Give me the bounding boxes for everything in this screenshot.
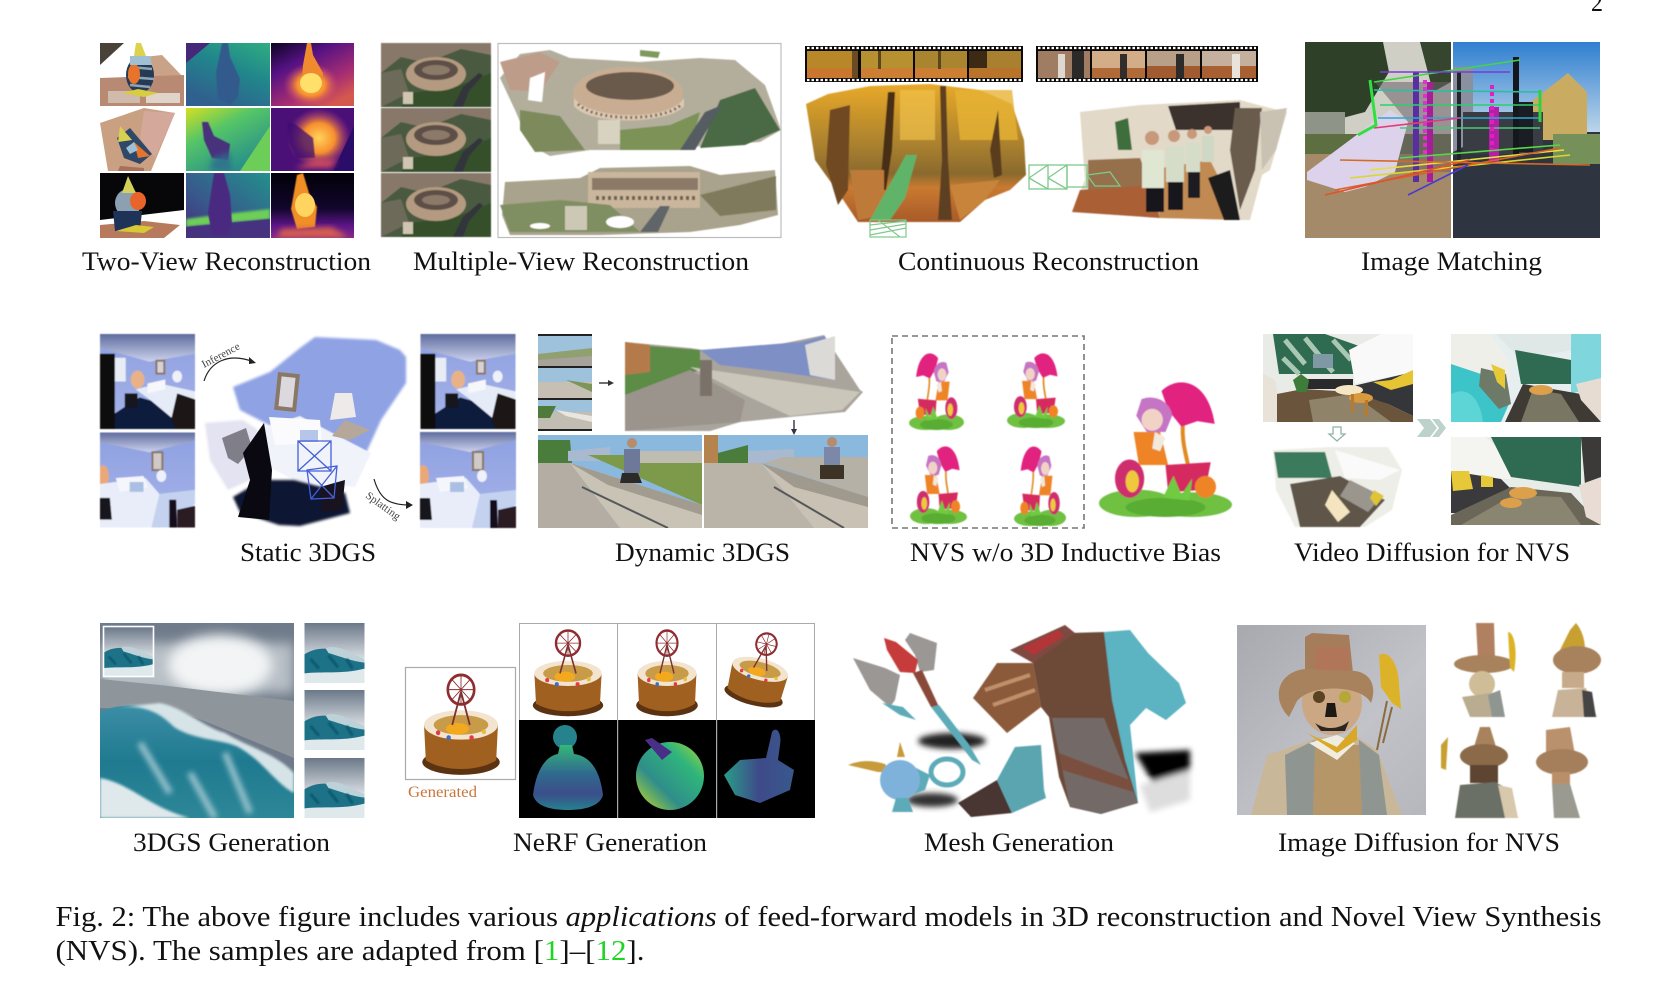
image: input room [1263,334,1413,422]
image: feature view 1 [271,43,354,106]
figure caption: (NVS). The samples are adapted from [ 1]–[12]. [56,935,645,967]
panel: 3DGS generation [100,623,364,857]
boot [958,745,1046,817]
panel: video diffusion for NVS [1263,334,1601,567]
image: colosseum frames [381,43,491,237]
image: wave views [304,623,364,818]
caption: Dynamic 3DGS [615,538,790,567]
arrow: splatting: Splatting [363,490,403,523]
toy views [909,353,1066,526]
camera path: forest [870,220,906,237]
image: input views [97,334,195,528]
rendered cake views [520,624,814,720]
image: parrot view 1 [100,43,184,106]
panel: dynamic 3DGS [538,334,868,567]
axe [853,633,981,765]
point cloud: forest [806,84,1026,222]
image: rendered views [417,334,516,528]
image: rendered views [538,435,702,528]
camera path: room [1029,165,1120,189]
image: feature view 2 [271,108,354,171]
panel: multiple-view reconstruction [381,43,781,276]
caption: Image Matching [1361,247,1542,276]
caption: Mesh Generation [924,828,1114,857]
image: large wave [100,623,294,818]
point cloud: top view [500,50,781,156]
image: scarecrow portrait [1237,625,1426,815]
image: depth view 1 [186,43,270,106]
armor [973,625,1186,814]
3D gaussian scene [205,337,406,526]
lamp [848,742,963,812]
label: generated: Generated [408,784,477,801]
caption: Multiple-View Reconstruction [413,247,749,276]
arrow: inference: Inference [200,341,242,371]
image: film frames [538,334,592,431]
panel: static 3DGS [97,334,516,567]
image: left playground [1305,42,1451,238]
panel: NVS without 3D inductive bias [892,336,1232,567]
depth cake views [519,720,815,818]
arrow: down outline [1329,427,1345,441]
arrow: inference [200,341,256,381]
panel: mesh generation [848,625,1190,857]
image: parrot view 3 [100,173,184,238]
generated cake frame [406,668,516,780]
image: right playground [1453,42,1600,238]
panel: image diffusion for NVS [1237,623,1601,857]
arrow: down [791,420,797,435]
caption: NVS w/o 3D Inductive Bias [910,538,1221,567]
box: colosseum point cloud [498,44,781,238]
caption: Two-View Reconstruction [82,247,371,276]
chevrons [1417,419,1446,437]
panel: continuous reconstruction [805,46,1287,276]
caption: Static 3DGS [240,538,376,567]
image: output top [1451,334,1601,422]
image: output bottom [1451,437,1601,525]
point cloud: road scene [625,335,863,431]
film strip: room [1036,46,1258,82]
scarecrow views [1441,623,1601,818]
panel: two-view reconstruction [82,43,371,276]
caption: Image Diffusion for NVS [1278,828,1560,857]
arrow: splatting [363,479,413,523]
caption: Continuous Reconstruction [898,247,1199,276]
large toy [1099,382,1232,517]
point cloud: room [1072,100,1287,220]
caption: NeRF Generation [513,828,707,857]
caption: 3DGS Generation [133,828,330,857]
figure caption [56,901,1602,967]
image: depth view 3 [186,173,270,238]
image: feature view 3 [271,173,354,238]
caption: Video Diffusion for NVS [1294,538,1570,567]
image: depth view 2 [186,108,270,171]
figure caption: Fig. 2: The above figure includes various applications of feed-forward models in 3D reconstruction and Novel View Synthesis [56,901,1602,933]
panel: image matching [1305,42,1600,276]
inset frame [104,626,154,676]
point cloud room [1273,447,1402,527]
shadows [906,733,1190,812]
point cloud: bottom view [500,166,778,235]
dashed box [892,336,1084,528]
image: parrot view 2 [100,108,175,171]
film strip: forest [805,46,1023,82]
feature match lines [1325,60,1590,195]
arrow: right [599,380,614,386]
panel: NeRF generation [406,624,815,857]
camera frustums [298,441,337,499]
